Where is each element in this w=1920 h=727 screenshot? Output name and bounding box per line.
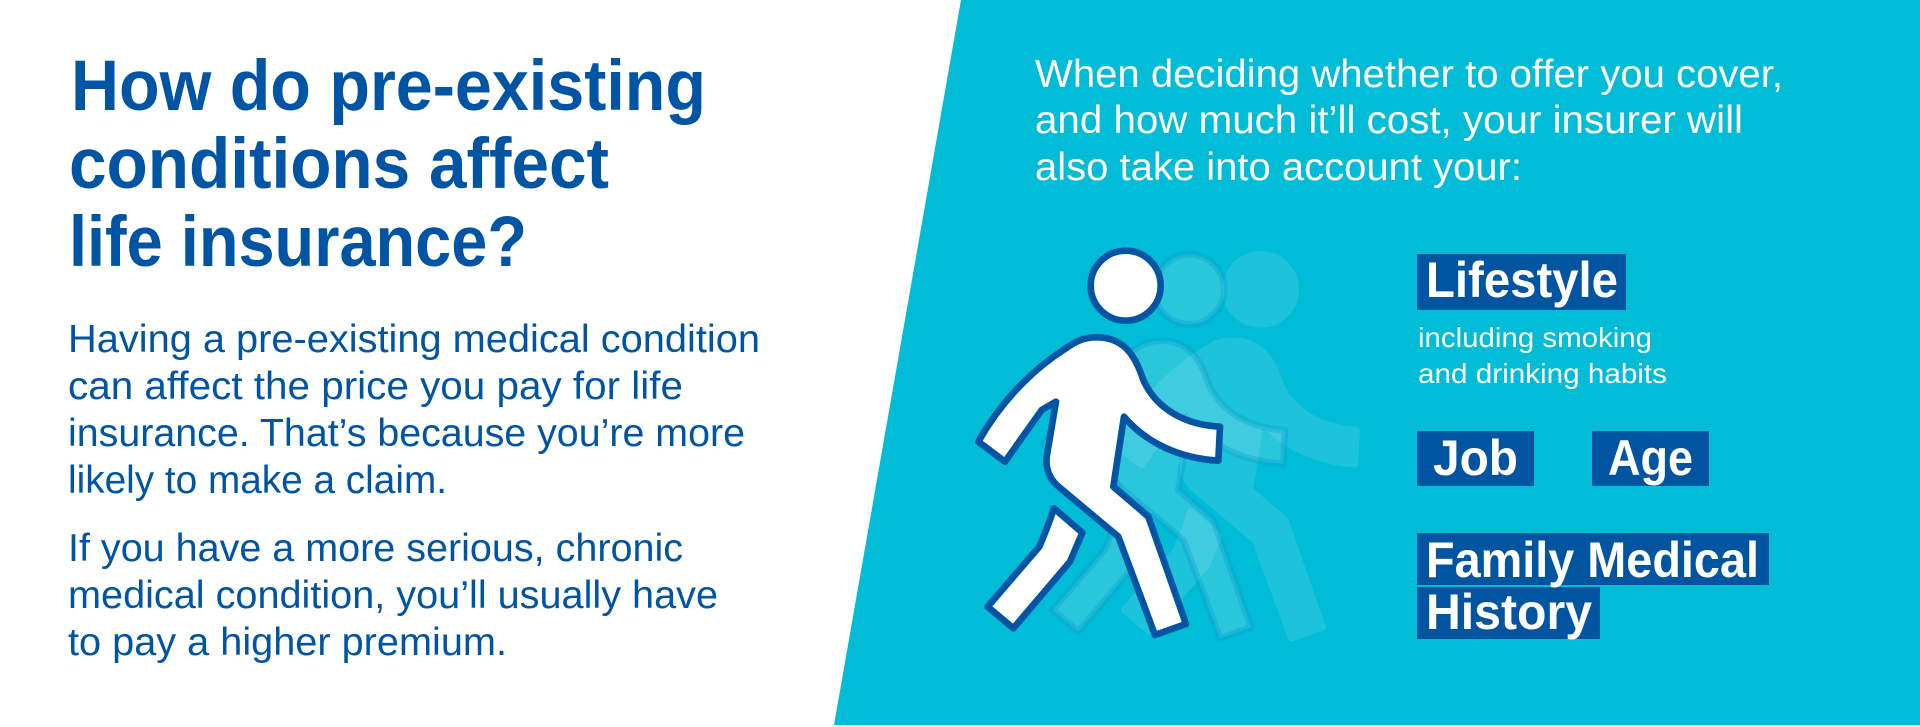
text block: insurer intro: When deciding whether to offer you cover, <box>1035 53 1783 96</box>
tag: family medical history: Family Medical <box>1426 532 1759 588</box>
tag: job: Job <box>1433 430 1518 486</box>
panel: teal background <box>834 0 1920 725</box>
text block: chronic conditions: medical condition, you’ll usually have <box>68 574 718 617</box>
text block: lifestyle detail: and drinking habits <box>1418 358 1667 389</box>
text block: insurer intro <box>1035 53 1783 189</box>
tag: family medical history <box>1417 532 1769 640</box>
icon: middle trailing figure <box>1043 254 1285 638</box>
text block: price effect: insurance. That’s because you’re more <box>68 412 745 455</box>
title: conditions affect <box>69 125 609 204</box>
text block: price effect: likely to make a claim. <box>68 459 447 502</box>
text block: price effect <box>68 318 760 502</box>
icon: walking person with motion trail <box>978 251 1357 638</box>
text block: price effect: Having a pre-existing medical condition <box>68 318 760 361</box>
text block: insurer intro: also take into account your: <box>1035 146 1522 189</box>
text block: lifestyle detail: including smoking <box>1418 322 1652 353</box>
tag: age: Age <box>1608 430 1693 486</box>
tag: family medical history: History <box>1426 584 1592 640</box>
text block: chronic conditions: to pay a higher premium. <box>68 621 507 664</box>
text block: price effect: can affect the price you pay for life <box>68 365 683 408</box>
title: life insurance? <box>69 203 527 282</box>
text block: lifestyle detail <box>1418 322 1667 389</box>
title <box>69 47 706 282</box>
title: How do pre-existing <box>71 47 706 126</box>
icon: faint trailing figure <box>1115 254 1357 638</box>
text block: insurer intro: and how much it’ll cost, your insurer will <box>1035 99 1743 142</box>
tag: lifestyle: Lifestyle <box>1426 252 1618 308</box>
icon: front figure <box>978 251 1220 635</box>
text block: chronic conditions <box>68 527 718 664</box>
text block: chronic conditions: If you have a more serious, chronic <box>68 527 683 570</box>
